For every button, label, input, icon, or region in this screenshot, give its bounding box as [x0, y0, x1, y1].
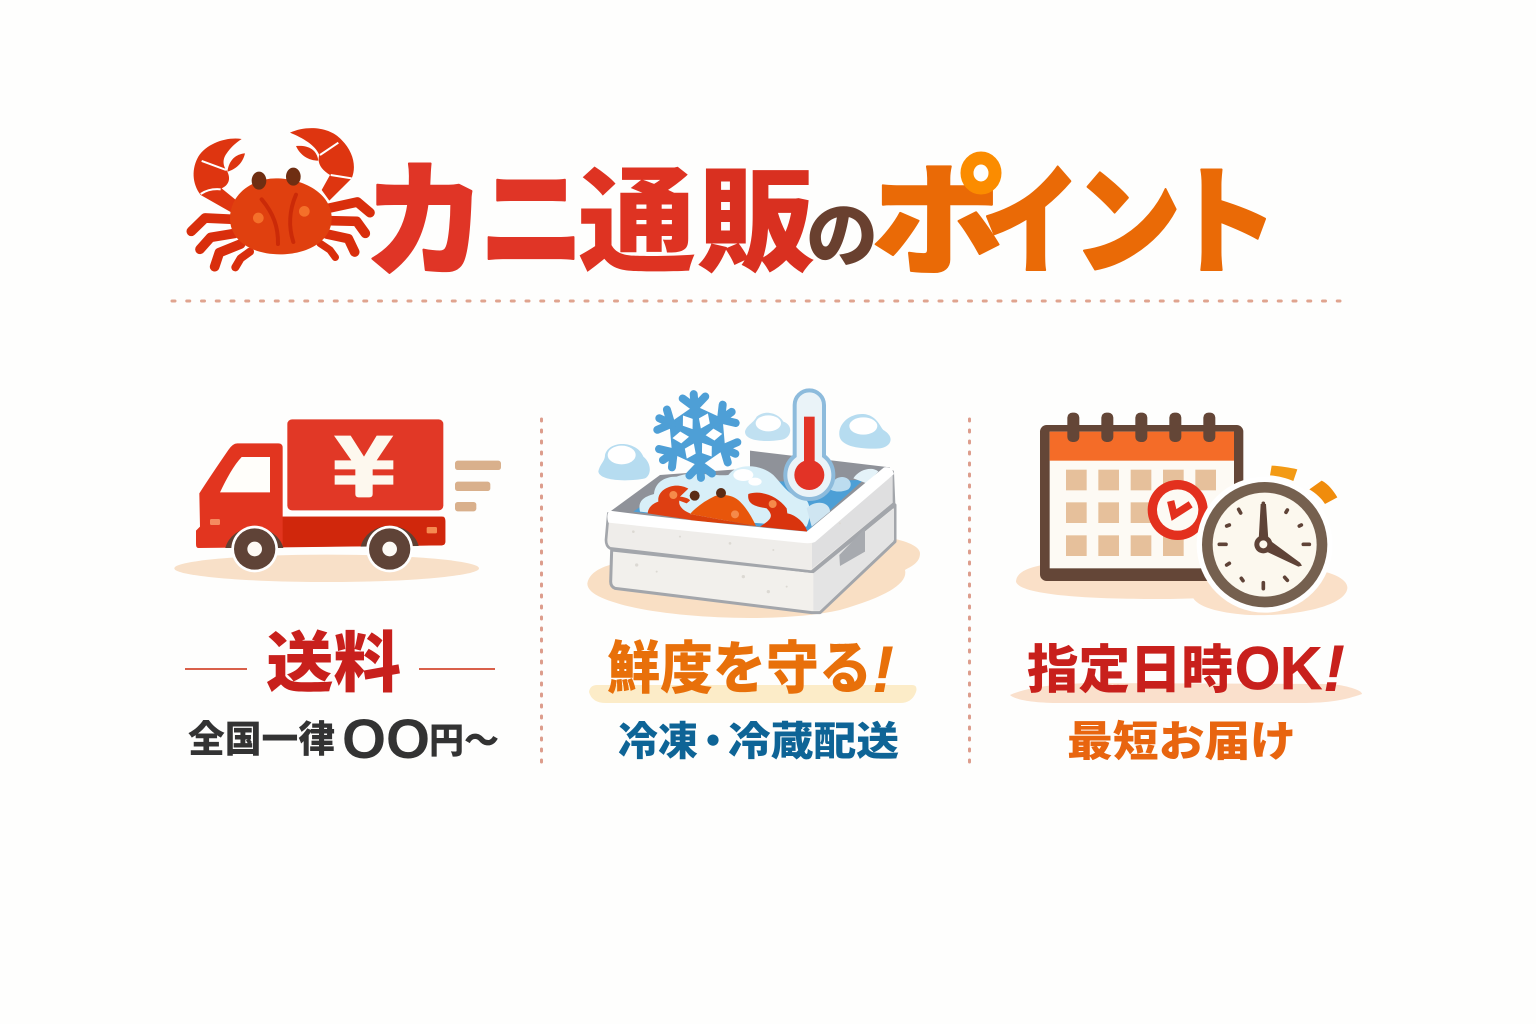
title: ト — [1170, 158, 1278, 290]
title: ニ — [480, 156, 584, 288]
text: frozen and chilled delivery: 冷蔵配送 — [728, 720, 899, 764]
panel: date and time: ! — [1323, 631, 1345, 705]
panel: date and time — [1010, 413, 1362, 765]
text: frozen and chilled delivery: ・ — [693, 720, 733, 764]
icon: thermometer — [785, 390, 833, 499]
icon: calendar and clock — [1016, 413, 1347, 615]
title: イ — [982, 158, 1080, 290]
text: frozen and chilled delivery — [618, 720, 899, 764]
text: nationwide flat rate: 全国一律 — [188, 719, 335, 760]
icon: crab — [191, 128, 370, 267]
title — [364, 152, 1278, 293]
heading band — [589, 685, 916, 703]
title: の — [806, 197, 878, 277]
stopwatch clock — [1197, 466, 1337, 613]
icon: snowflake — [654, 391, 740, 481]
title: カ — [364, 152, 486, 293]
heading: date and time OK: 指定日時 — [1027, 642, 1233, 700]
panel: freshness — [587, 390, 920, 764]
check badge — [1148, 480, 1208, 540]
text: nationwide flat rate: 円〜 — [429, 720, 499, 761]
panel: freshness: ! — [872, 632, 894, 706]
icon: delivery truck — [174, 419, 501, 582]
text: fastest delivery: 最短お届け — [1067, 718, 1296, 765]
icon: snow mounds — [598, 413, 891, 480]
foam speckles — [632, 522, 841, 593]
heading band — [1010, 683, 1362, 703]
title: 通 — [578, 160, 696, 287]
text: frozen and chilled delivery: 冷凍 — [618, 720, 698, 764]
crab in box — [648, 486, 807, 532]
title: 販 — [697, 160, 815, 287]
title: ポ — [872, 154, 1004, 290]
text: nationwide flat rate: OO — [342, 707, 430, 770]
panel: shipping — [174, 419, 501, 770]
heading: keep freshness: 鮮度を守る — [607, 637, 872, 701]
text: nationwide flat rate — [188, 707, 499, 770]
title: ン — [1073, 158, 1181, 290]
icon: styrofoam box with crab, snowflake and thermometer — [587, 390, 920, 618]
panel: date and time: OK — [1235, 635, 1322, 702]
heading: shipping: 送料 — [266, 626, 401, 700]
